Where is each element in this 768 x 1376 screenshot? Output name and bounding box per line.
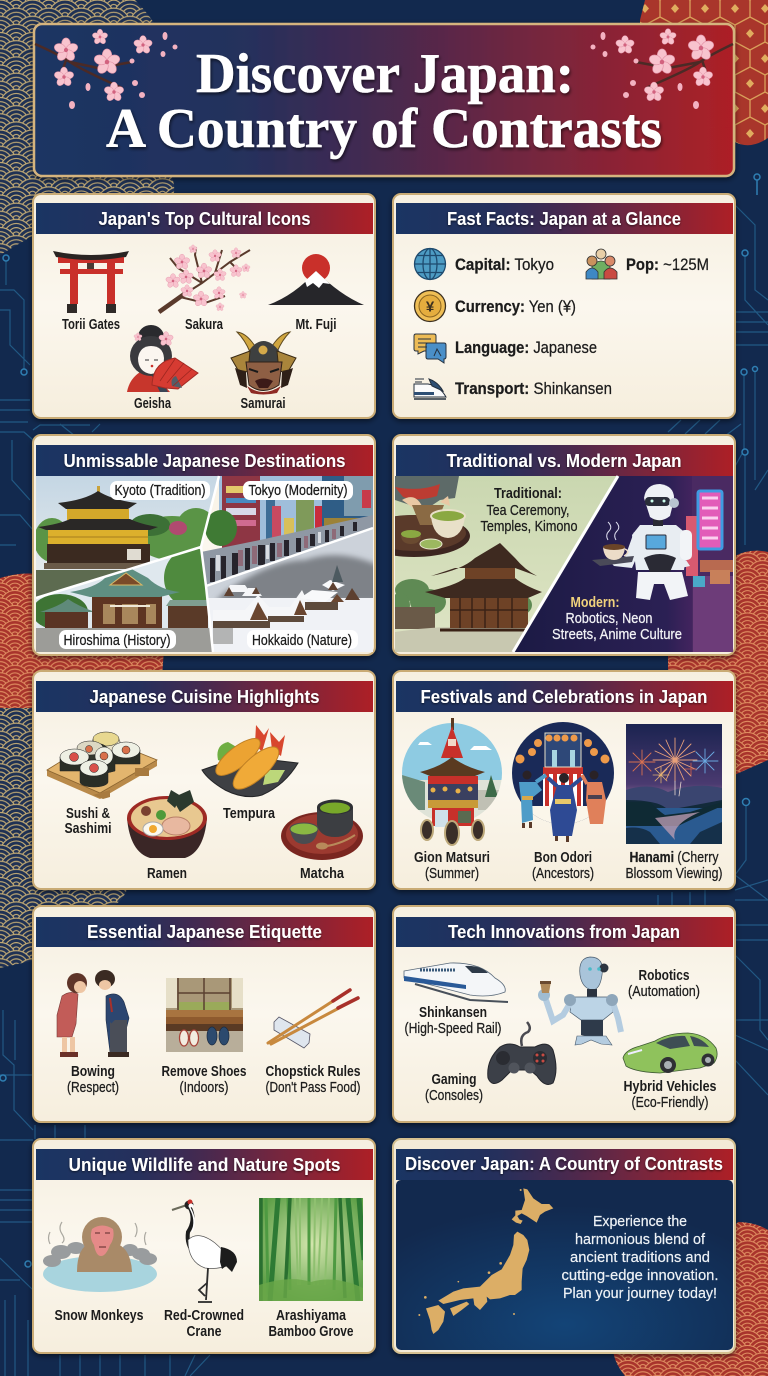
icon: sakura branch xyxy=(159,245,250,312)
heading xyxy=(396,445,733,476)
text: traditional: Temples, Kimono xyxy=(480,519,578,535)
label: Hanami (Cherry xyxy=(630,850,719,866)
red wave pattern left xyxy=(0,574,165,712)
icon: yen coin: ¥ xyxy=(426,298,435,316)
heading xyxy=(36,445,373,476)
panel: destinations xyxy=(32,435,380,655)
label: Robotics xyxy=(638,968,690,984)
icon: Mt. Fuji xyxy=(268,254,364,305)
icon: matcha set xyxy=(281,800,363,860)
label xyxy=(64,806,112,837)
label xyxy=(414,850,490,882)
label: (Don't Pass Food) xyxy=(266,1080,360,1096)
closing text: harmonious blend of xyxy=(575,1231,706,1248)
fact: capital: Capital: Tokyo xyxy=(455,255,554,274)
heading xyxy=(396,203,733,234)
illustration: chopsticks xyxy=(268,990,358,1048)
photo: Tokyo crossing xyxy=(201,476,373,586)
label: Sakura xyxy=(185,317,224,333)
illustration: fireworks over river xyxy=(626,724,722,844)
fact: language: Language: Japanese xyxy=(455,338,597,357)
label: Sushi & xyxy=(66,806,110,822)
red hexagon pattern top right xyxy=(640,0,768,145)
label: Geisha xyxy=(134,396,172,412)
heading xyxy=(36,203,373,234)
gold wave pattern top left xyxy=(0,0,174,255)
label: Hybrid Vehicles xyxy=(624,1079,716,1095)
label: Mt. Fuji xyxy=(296,317,336,333)
label: Arashiyama xyxy=(276,1308,347,1324)
label: Tokyo: Tokyo (Modernity) xyxy=(248,483,348,499)
panel: wildlife xyxy=(33,1139,375,1353)
heading: Discover Japan: A Country of Contrasts xyxy=(405,1153,723,1174)
closing text: Experience the xyxy=(593,1213,687,1230)
icon: speech bubbles xyxy=(414,334,446,363)
heading: Japan's Top Cultural Icons xyxy=(98,208,310,229)
heading xyxy=(36,917,373,947)
divider lines between photos xyxy=(36,476,373,652)
text: modern: Robotics, Neon xyxy=(566,611,652,627)
label xyxy=(404,1005,502,1037)
label: (Consoles) xyxy=(425,1088,483,1104)
text: traditional xyxy=(480,486,578,535)
panel: festivals xyxy=(393,671,735,889)
heading: Unmissable Japanese Destinations xyxy=(64,450,346,471)
heading xyxy=(36,681,373,712)
label: (Respect) xyxy=(67,1080,119,1096)
red wave pattern bottom right xyxy=(613,1222,768,1376)
label: (Automation) xyxy=(628,984,700,1000)
label: Sashimi xyxy=(64,821,112,837)
scene: traditional side xyxy=(395,476,616,652)
icon: sushi board xyxy=(47,732,157,799)
photo: Hokkaido snow village xyxy=(206,528,380,654)
heading: Fast Facts: Japan at a Glance xyxy=(447,208,681,229)
label: Gaming xyxy=(432,1072,476,1088)
panel: traditional vs modern xyxy=(358,435,735,655)
label: Tempura xyxy=(223,806,276,822)
closing text: Plan your journey today! xyxy=(563,1285,717,1302)
label xyxy=(164,1308,244,1340)
illustration: shoes at entrance xyxy=(166,978,243,1052)
panel: etiquette xyxy=(33,906,375,1122)
icon: samurai helmet xyxy=(231,332,296,394)
label: (Ancestors) xyxy=(532,866,594,882)
label xyxy=(268,1308,354,1340)
label xyxy=(628,968,700,1000)
photo: Hiroshima shrine xyxy=(36,548,212,652)
illustration: bowing xyxy=(57,970,129,1057)
heading: Japanese Cuisine Highlights xyxy=(90,686,320,707)
label: Gion Matsuri xyxy=(414,850,490,866)
title text xyxy=(106,43,662,160)
text: traditional: Tea Ceremony, xyxy=(486,503,570,519)
heading: Tech Innovations from Japan xyxy=(448,921,680,942)
icon: ramen bowl xyxy=(127,790,207,858)
heading xyxy=(396,681,733,712)
closing text: ancient traditions and xyxy=(570,1249,710,1266)
label: Chopstick Rules xyxy=(266,1064,360,1080)
heading: Festivals and Celebrations in Japan xyxy=(420,686,708,707)
cherry blossoms right xyxy=(590,29,733,109)
illustration: Bon Odori dancers xyxy=(510,722,616,842)
icon: geisha xyxy=(127,325,198,392)
label: Matcha xyxy=(300,866,345,882)
scene: modern side xyxy=(510,476,734,652)
heading xyxy=(36,1149,373,1180)
heading: Traditional vs. Modern Japan xyxy=(446,450,682,471)
divider xyxy=(513,476,618,652)
label: Crane xyxy=(186,1324,222,1340)
heading: Essential Japanese Etiquette xyxy=(87,921,322,942)
label: Hokkaido: Hokkaido (Nature) xyxy=(252,633,352,649)
label: Bowing xyxy=(71,1064,115,1080)
label: (High-Speed Rail) xyxy=(404,1021,502,1037)
navy wave pattern left xyxy=(0,708,128,968)
label: Shinkansen xyxy=(419,1005,487,1021)
label: Red-Crowned xyxy=(164,1308,244,1324)
label xyxy=(266,1064,360,1096)
robot xyxy=(610,484,692,600)
label: Snow Monkeys xyxy=(54,1308,144,1324)
icon: yen coin xyxy=(414,290,446,322)
icon: people xyxy=(586,249,617,279)
label xyxy=(626,850,722,882)
label: Bamboo Grove xyxy=(268,1324,354,1340)
icon: train xyxy=(414,379,446,399)
text: modern: Streets, Anime Culture xyxy=(552,627,682,643)
title banner xyxy=(34,24,734,176)
heading xyxy=(396,917,733,947)
icon: tempura xyxy=(202,725,298,797)
closing text: cutting-edge innovation. xyxy=(562,1267,718,1284)
text: modern: Modern: xyxy=(570,595,620,611)
label: (Summer) xyxy=(425,866,479,882)
label xyxy=(162,1064,246,1096)
label xyxy=(532,850,594,882)
map of Japan xyxy=(418,1188,553,1334)
label: (Indoors) xyxy=(180,1080,228,1096)
photo: Kyoto golden pavilion xyxy=(34,476,220,602)
illustration: bullet train xyxy=(404,963,508,1002)
illustration: snow monkey xyxy=(43,1217,157,1292)
fact: transport: Transport: Shinkansen xyxy=(455,379,612,398)
illustration: Gion float xyxy=(400,718,504,845)
label: (Eco-Friendly) xyxy=(632,1095,708,1111)
illustration: hybrid car xyxy=(623,1033,717,1073)
label: Blossom Viewing) xyxy=(626,866,722,882)
icon: globe xyxy=(414,248,446,280)
icon: torii gate xyxy=(53,251,129,313)
fact: population: Pop: ~125M xyxy=(626,255,709,274)
title text: A Country of Contrasts xyxy=(106,98,662,160)
closing text xyxy=(562,1213,718,1302)
text: modern xyxy=(552,595,682,643)
label xyxy=(624,1079,716,1111)
illustration: robot holding cup xyxy=(538,957,621,1045)
label: Bon Odori xyxy=(534,850,592,866)
panel: cuisine xyxy=(33,671,375,889)
illustration: red-crowned crane xyxy=(172,1200,237,1302)
title text: Discover Japan: xyxy=(196,43,574,105)
illustration: game controller xyxy=(488,1022,556,1084)
label: Remove Shoes xyxy=(162,1064,246,1080)
illustration: bamboo grove xyxy=(259,1198,364,1301)
label: Hiroshima: Hiroshima (History) xyxy=(64,633,170,649)
panel: closing call to action xyxy=(393,1139,735,1353)
label xyxy=(425,1072,483,1104)
panel: Japan's top cultural icons xyxy=(33,194,375,418)
fact: currency: Currency: Yen (¥) xyxy=(455,297,576,316)
cherry blossoms left xyxy=(35,29,178,109)
label: Ramen xyxy=(147,866,187,882)
panel: fast facts xyxy=(393,194,735,418)
label: Torii Gates xyxy=(62,317,120,333)
red wave pattern right xyxy=(668,551,768,776)
label: Samurai xyxy=(240,396,286,412)
label: Kyoto: Kyoto (Tradition) xyxy=(114,483,206,499)
heading xyxy=(396,1149,733,1180)
label xyxy=(67,1064,119,1096)
heading: Unique Wildlife and Nature Spots xyxy=(68,1154,340,1175)
panel: tech innovations xyxy=(393,906,735,1122)
text: traditional: Traditional: xyxy=(494,486,562,502)
